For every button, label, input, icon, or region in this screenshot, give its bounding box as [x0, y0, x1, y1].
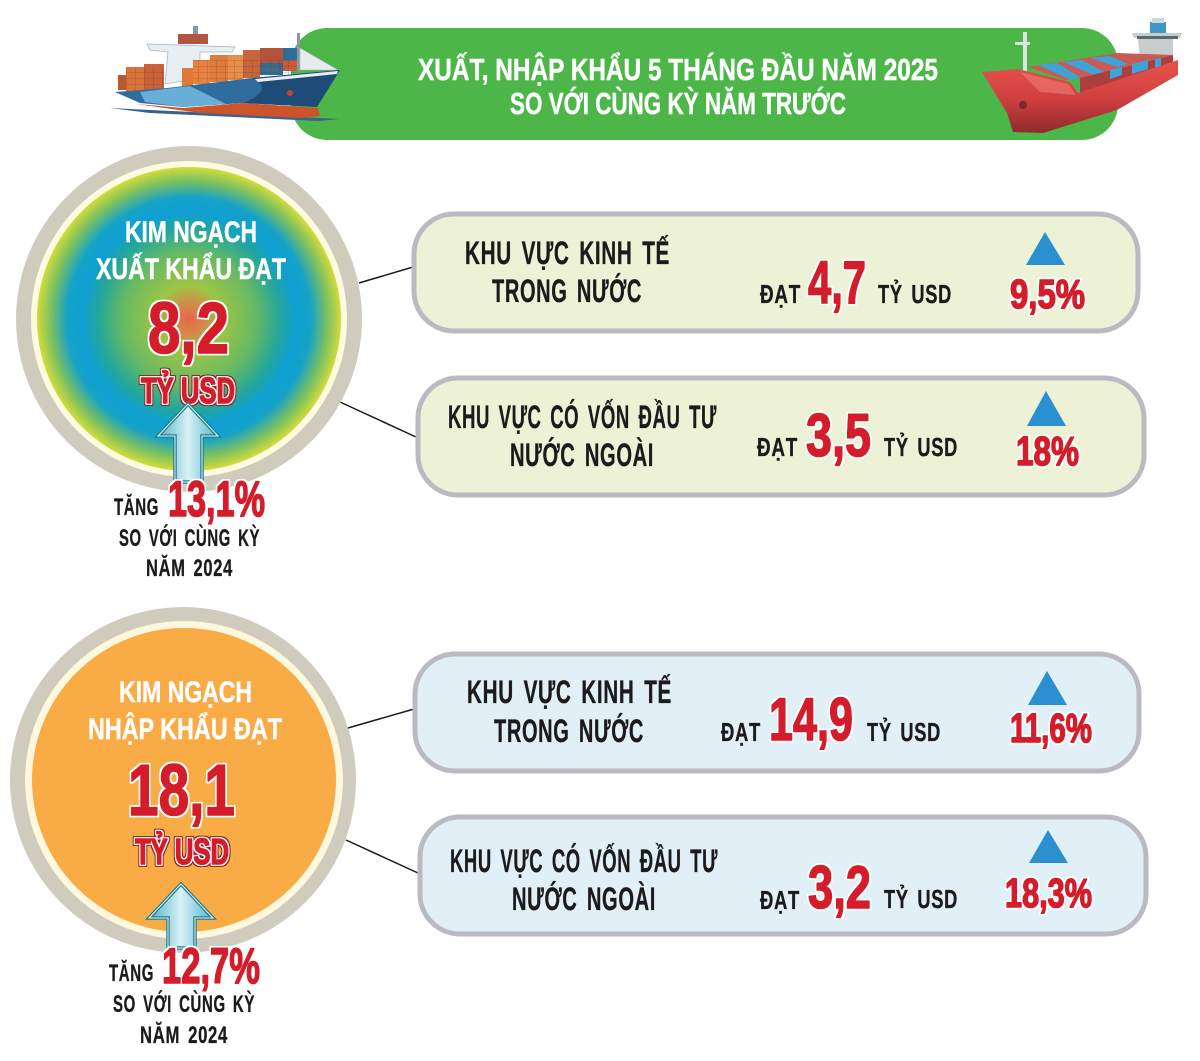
- export circle: KIM NGẠCH: [125, 216, 257, 249]
- import circle: KIM NGẠCH: [119, 676, 252, 709]
- connector lines: [346, 709, 418, 873]
- export circle: 8,2: [148, 289, 229, 369]
- panel: foreign invested exports: ĐẠT: [757, 432, 798, 462]
- growth note: 12,7%: [162, 938, 260, 994]
- arrow up: [158, 404, 218, 482]
- header banner: [110, 18, 1182, 140]
- panel: domestic imports: TỶ USD: [867, 717, 941, 747]
- icon: up triangle: [1027, 391, 1066, 426]
- panel: domestic exports: 4,7: [808, 249, 866, 316]
- panel: foreign invested exports: KHU VỰC CÓ VỐN ĐẦU TƯ: [448, 399, 717, 435]
- panel: foreign invested imports: KHU VỰC CÓ VỐN ĐẦU TƯ: [450, 843, 718, 879]
- panel: foreign invested exports: TỶ USD: [884, 432, 958, 462]
- import circle: TỶ USD: [135, 831, 229, 872]
- panel: foreign invested exports: 3,5: [806, 402, 871, 469]
- panel: domestic imports: 14,9: [769, 686, 853, 753]
- export circle: [16, 146, 362, 492]
- growth note: NĂM 2024: [140, 1021, 228, 1049]
- panel: domestic imports: [415, 654, 1139, 771]
- panel: domestic imports: 11,6%: [1010, 705, 1092, 751]
- growth note: TĂNG: [109, 959, 154, 987]
- panel: domestic exports: TRONG NƯỚC: [492, 273, 642, 309]
- growth note: [114, 471, 265, 582]
- panel: foreign invested imports: 3,2: [808, 854, 871, 921]
- panel: domestic imports: TRONG NƯỚC: [494, 713, 644, 749]
- panel: domestic exports: [414, 214, 1138, 331]
- panel: domestic exports: 9,5%: [1010, 271, 1085, 317]
- export circle: TỶ USD: [141, 370, 235, 411]
- panel: foreign invested imports: TỶ USD: [884, 884, 958, 914]
- panel: foreign invested exports: NƯỚC NGOÀI: [510, 437, 654, 473]
- icon: up triangle: [1029, 830, 1068, 863]
- panel: domestic imports: KHU VỰC KINH TẾ: [467, 674, 672, 710]
- connector lines: [340, 267, 416, 437]
- import section: [10, 607, 1146, 1049]
- growth note: SO VỚI CÙNG KỲ: [113, 990, 255, 1018]
- growth note: SO VỚI CÙNG KỲ: [119, 524, 260, 552]
- export section: [16, 146, 1144, 582]
- icon: blue container ship: [110, 26, 340, 121]
- export circle: XUẤT KHẨU ĐẠT: [96, 252, 286, 286]
- panel: domestic exports: KHU VỰC KINH TẾ: [465, 235, 670, 271]
- growth note: TĂNG: [114, 493, 159, 521]
- arrow up: [149, 884, 213, 948]
- banner title: SO VỚI CÙNG KỲ NĂM TRƯỚC: [510, 85, 846, 121]
- import circle: [10, 607, 356, 953]
- import circle: 18,1: [128, 751, 235, 831]
- growth note: NĂM 2024: [146, 554, 233, 582]
- panel: foreign invested exports: [418, 378, 1144, 495]
- growth note: 13,1%: [168, 471, 265, 527]
- panel: domestic exports: ĐẠT: [760, 279, 801, 309]
- banner background: [291, 28, 1118, 140]
- icon: up triangle: [1026, 232, 1065, 265]
- panel: domestic exports: TỶ USD: [878, 279, 952, 309]
- panel: foreign invested exports: 18%: [1016, 428, 1079, 474]
- panel: foreign invested imports: [420, 817, 1146, 934]
- panel: domestic imports: ĐẠT: [721, 717, 761, 747]
- banner title: [418, 51, 938, 121]
- growth note: [109, 938, 260, 1049]
- icon: up triangle: [1028, 671, 1067, 705]
- banner title: XUẤT, NHẬP KHẨU 5 THÁNG ĐẦU NĂM 2025: [418, 51, 938, 87]
- panel: foreign invested imports: NƯỚC NGOÀI: [512, 881, 656, 917]
- panel: foreign invested imports: 18,3%: [1005, 870, 1092, 916]
- panel: foreign invested imports: ĐẠT: [760, 885, 800, 915]
- import circle: NHẬP KHẨU ĐẠT: [88, 712, 282, 746]
- icon: red cargo ship: [982, 18, 1182, 133]
